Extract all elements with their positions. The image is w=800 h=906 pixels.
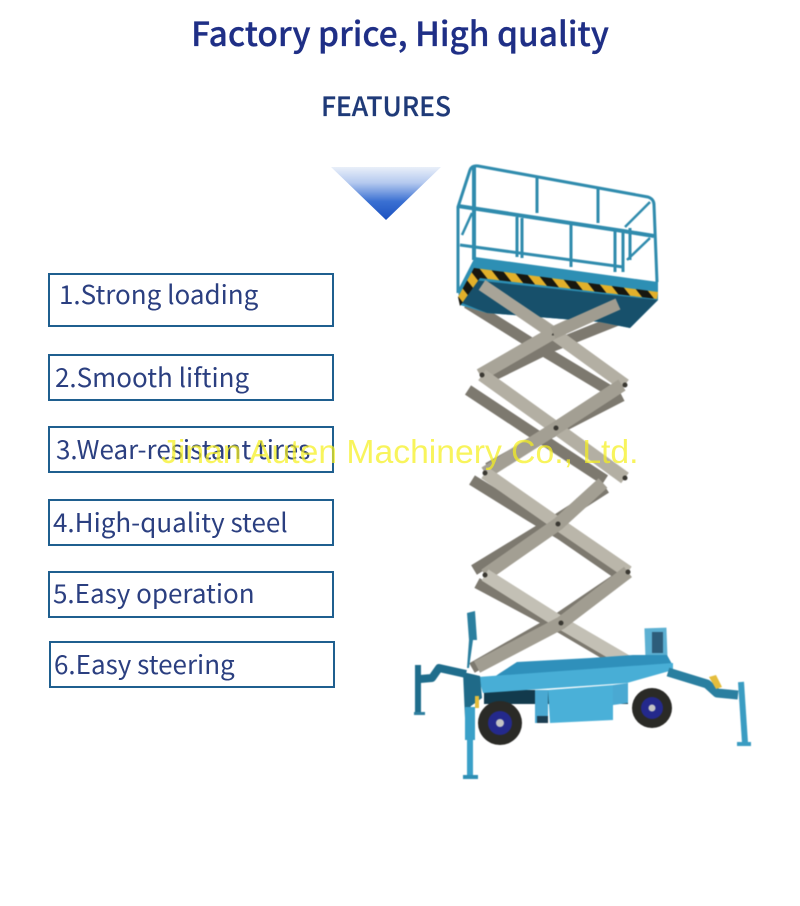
icon: down arrow <box>331 167 441 220</box>
upper arm over deck <box>482 285 618 333</box>
platform deck <box>458 257 658 328</box>
feature box 1: 1.Strong loading <box>59 275 258 312</box>
feature box 1 <box>48 273 334 327</box>
scissor front arms <box>477 283 633 667</box>
title: Factory price, High quality <box>191 7 609 56</box>
feature box 4 <box>48 499 334 546</box>
feature box 6 <box>49 641 335 688</box>
wheels <box>478 688 672 745</box>
feature box 3: 3.Wear-resistant tires <box>56 430 310 467</box>
chassis <box>463 628 673 723</box>
heading: features: FEATURES <box>321 85 451 124</box>
feature box 6: 6.Easy steering <box>54 645 235 682</box>
stabilizer legs <box>418 665 745 775</box>
scissor pivot bolts <box>480 330 630 626</box>
leg feet and accents <box>414 675 751 779</box>
feature box 2 <box>48 354 334 401</box>
feature box 4: 4.High-quality steel <box>53 503 288 540</box>
feature box 2: 2.Smooth lifting <box>55 358 249 395</box>
steering handle <box>467 611 477 668</box>
feature box 5: 5.Easy operation <box>53 574 255 611</box>
platform guard rail <box>458 166 657 293</box>
feature box 3 <box>48 426 334 473</box>
scissor back arms <box>467 303 622 668</box>
feature box 5 <box>48 571 334 618</box>
watermark: Jinan Auten Machinery Co., Ltd. <box>161 433 639 471</box>
